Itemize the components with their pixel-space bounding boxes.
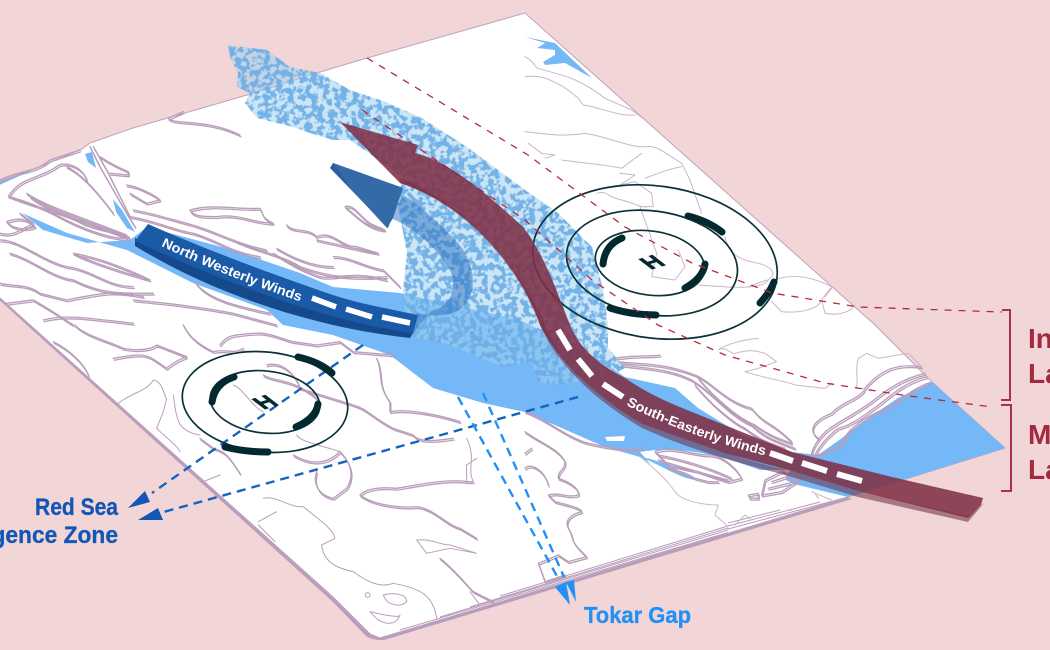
contours: fine lines north-east	[525, 57, 855, 314]
label: tokar gap: Tokar Gap	[584, 602, 691, 628]
ribbon dashes	[558, 330, 862, 481]
dust plume base	[228, 45, 625, 385]
map contours	[0, 57, 931, 623]
contours: doubled thick terrain lines	[0, 112, 930, 602]
ribbon top	[135, 224, 418, 333]
high pressure system: west	[177, 344, 353, 460]
high pressure system: east	[523, 170, 787, 354]
high pressure system: west: H	[248, 392, 285, 413]
marine layer dashed boundary	[362, 110, 992, 407]
high pressure system: east: H	[635, 252, 672, 273]
ribbon label: North Westerly Winds	[162, 238, 302, 301]
curved translucent tail	[390, 195, 473, 337]
convergence zone arrowheads	[128, 491, 163, 520]
arrow: north westerly winds	[135, 163, 473, 338]
contours: fine lines east and south	[640, 338, 922, 527]
label: red sea convergence zone: Red Sea	[35, 494, 119, 521]
arrowhead top	[333, 163, 403, 228]
bracket: inland layer	[1001, 310, 1010, 400]
ribbon side	[135, 238, 414, 338]
arrow: south-easterly winds	[340, 122, 984, 522]
tokar gap arrowheads	[555, 580, 576, 605]
red sea water	[0, 37, 1005, 497]
inland layer dashed boundary	[367, 58, 1002, 312]
label: red sea convergence zone	[0, 494, 119, 549]
ribbon label: South-Easterly Winds	[627, 398, 766, 455]
tokar gap dashed lines	[458, 393, 564, 578]
dust plume stipple	[228, 45, 625, 385]
ribbon top	[340, 122, 983, 518]
contours: fine lines south-west	[118, 380, 480, 623]
bracket: marine layer	[1001, 405, 1011, 491]
convergence zone dashed lines	[152, 345, 578, 513]
ribbon dashes	[312, 298, 410, 323]
arrowhead side	[330, 163, 403, 228]
ribbon side	[400, 178, 984, 522]
contours: doubled offset	[1, 113, 931, 603]
